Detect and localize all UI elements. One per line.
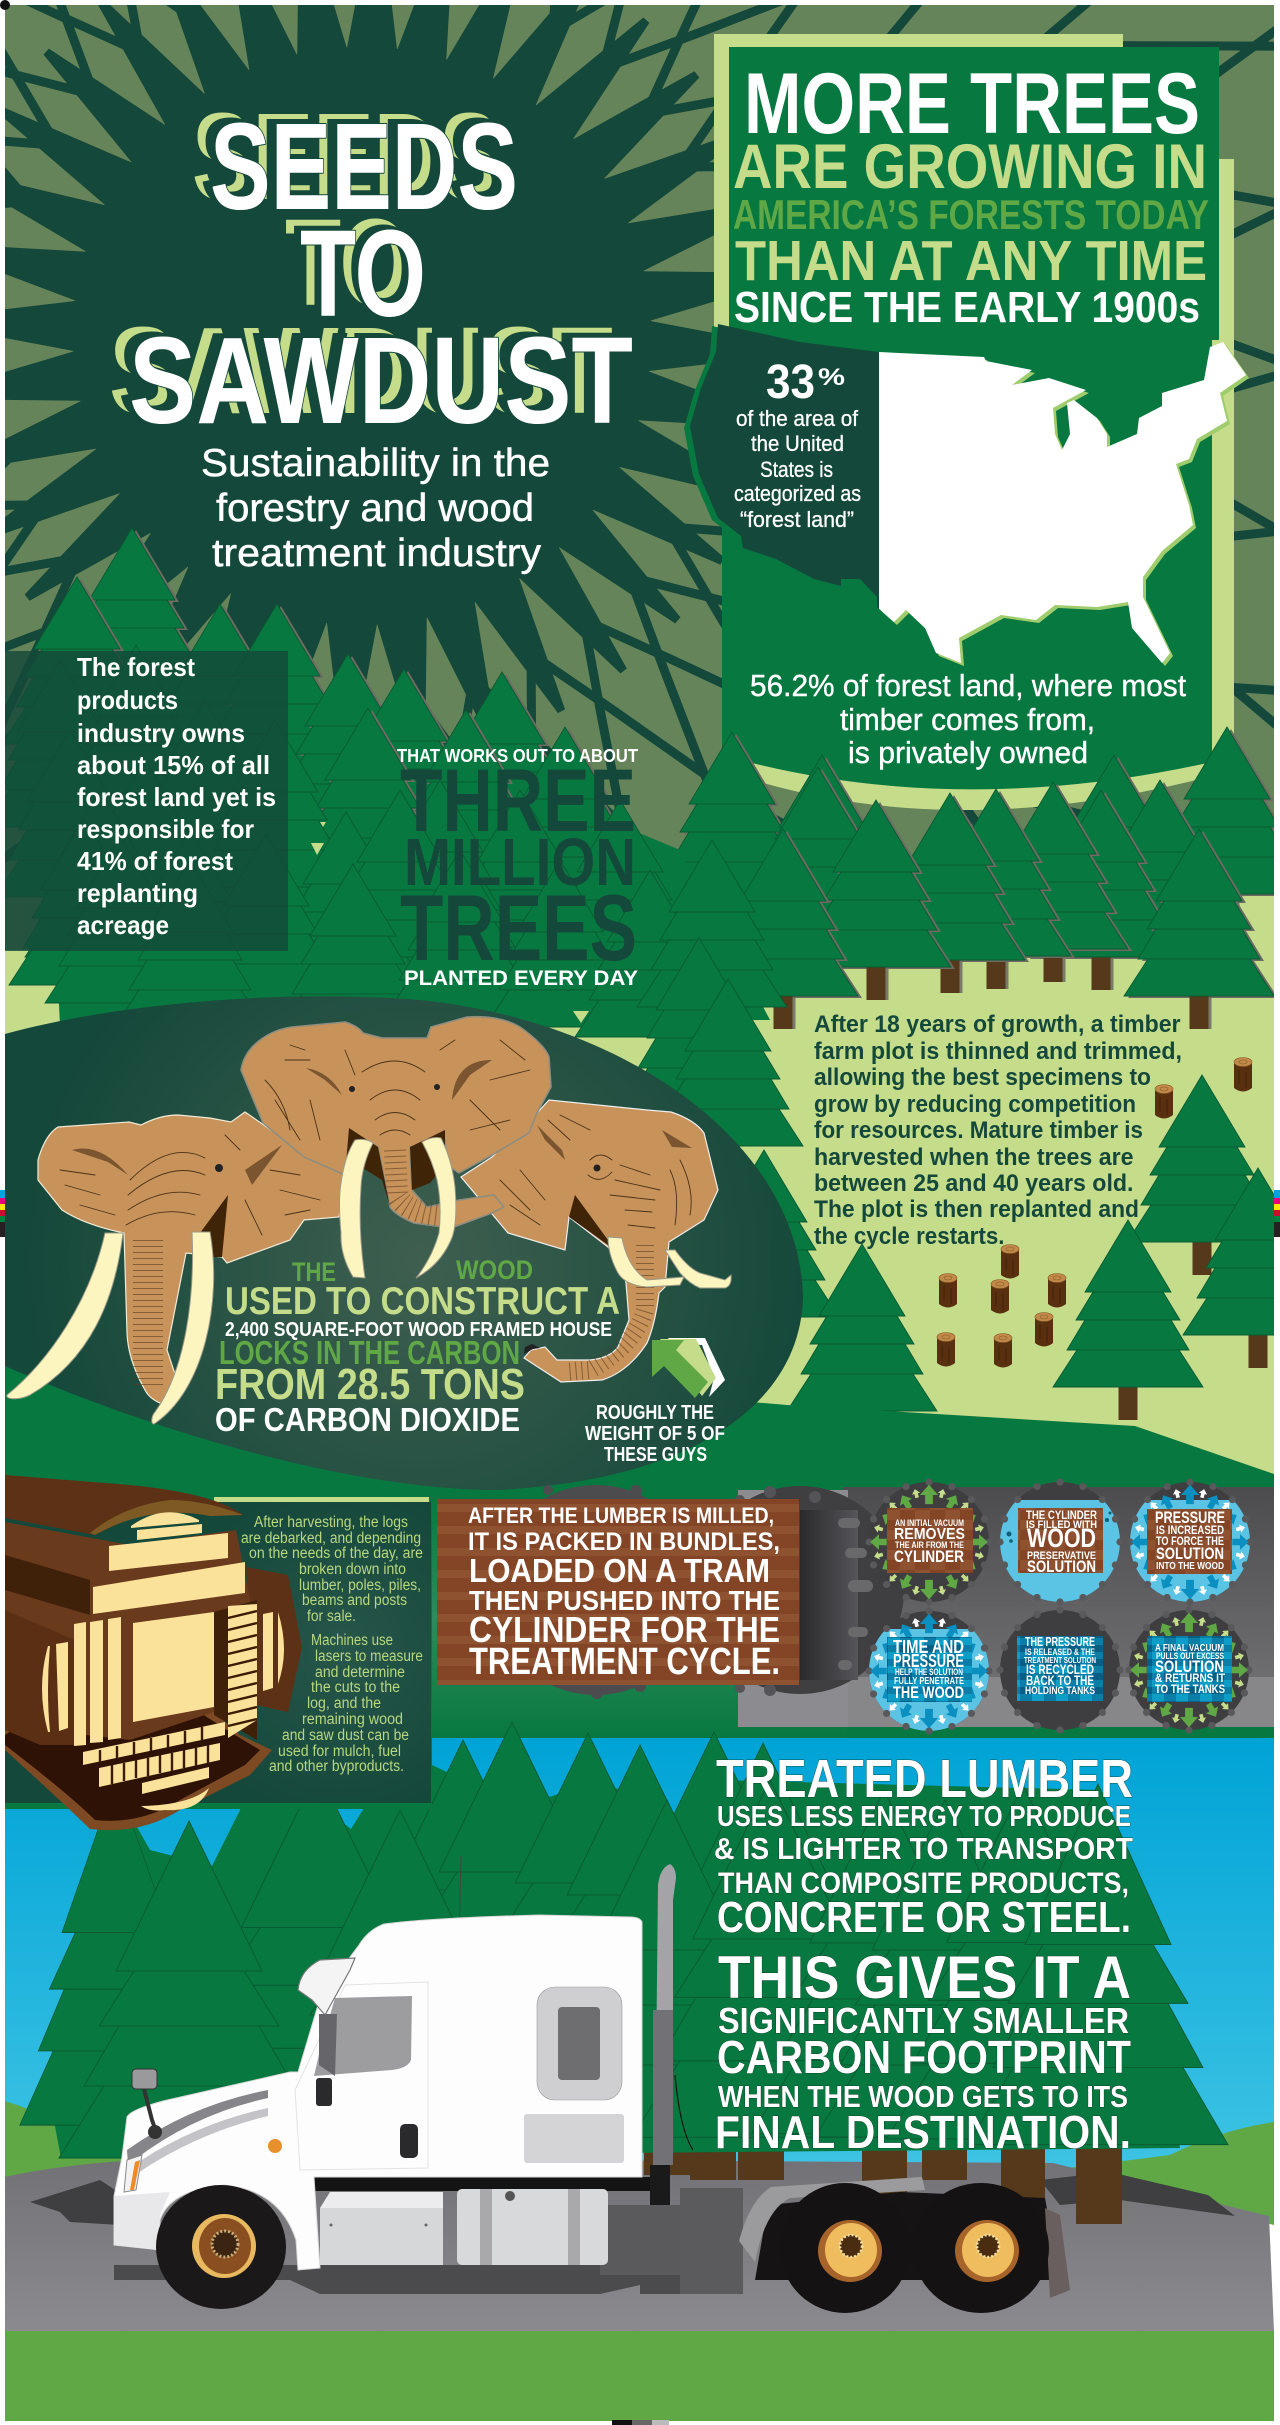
callout: three million trees: MILLION [404,825,636,900]
forest: back right trees [657,727,1280,1029]
text: log cutting: remaining wood [302,1711,403,1728]
text: timber cycle: After 18 years of growth, a timber [814,1011,1180,1038]
step 1: initial vacuum: THE AIR FROM THE [895,1540,964,1550]
stat: 33 percent: States is [760,457,833,482]
label: weight of elephants: WEIGHT OF 5 OF [585,1423,725,1445]
text: timber cycle: farm plot is thinned and trimmed, [814,1038,1182,1065]
step 4: time and pressure: TIME AND [893,1637,964,1657]
treatment band background [431,1487,1274,1765]
text: log cutting: After harvesting, the logs [254,1514,408,1531]
step 4: time and pressure: HELP THE SOLUTION [895,1667,963,1677]
step 2: cylinder filled: IS FILLED WITH [1026,1519,1097,1531]
door handle [400,2124,418,2158]
text: treated lumber: TREATED LUMBER [716,1749,1133,1809]
heading: more trees: THAN AT ANY TIME [735,229,1207,293]
background sunburst [5,5,1274,950]
text: timber cycle [814,1011,1182,1250]
title [112,112,632,424]
text: timber cycle: the cycle restarts. [814,1223,1004,1250]
subtitle: Sustainability in the [201,442,550,485]
stat: 33 percent: of the area of [736,406,859,431]
subtitle: forestry and wood [216,487,534,530]
heading: more trees: ARE GROWING IN [733,132,1207,202]
text: log cutting: broken down into [299,1561,406,1578]
toolbox and steps [320,2192,443,2265]
heading: more trees: SINCE THE EARLY 1900s [734,283,1200,332]
light green ground [5,895,1274,1490]
label: weight of elephants [585,1405,724,1461]
step 5: pressure released: IS RELEASED & THE [1025,1647,1095,1658]
forest: tall trees behind the truck [20,1722,1228,2224]
label: weight of elephants: ROUGHLY THE [596,1402,714,1424]
sleeper window [537,1987,622,2100]
text: log cutting: are debarked, and depending [241,1530,421,1547]
panel: forest ownership: 41% of forest [77,846,233,876]
text: privately owned [750,668,1186,770]
illustration: white semi truck [114,1856,1070,2313]
stat: 33 percent: the United [751,431,844,456]
text: log cutting: for sale. [307,1608,356,1625]
text: log cutting: log, and the [307,1695,381,1712]
subtitle: treatment industry [212,532,542,575]
step 2: cylinder filled: SOLUTION [1027,1557,1096,1576]
step 6: final vacuum: SOLUTION [1155,1657,1224,1676]
text: log cutting: the cuts to the [311,1679,400,1696]
panel: forest ownership: responsible for [77,814,254,844]
illustration: three elephants [7,1017,731,1424]
step 5: pressure released: BACK TO THE [1026,1672,1094,1688]
step 1: initial vacuum: CYLINDER [894,1547,964,1566]
title: SAWDUST [129,313,633,450]
title: TO [285,195,411,332]
step 6: final vacuum: & RETURNS IT [1155,1671,1226,1685]
panel: forest ownership: replanting [77,878,198,908]
bumper [114,2192,170,2250]
step 5: pressure released: TREATMENT SOLUTION [1024,1655,1096,1665]
text: carbon in a wood house: THE [292,1257,336,1287]
step 2: cylinder filled: PRESERVATIVE [1027,1550,1096,1562]
panel: after the lumber is milled: LOADED ON A TRAM [469,1552,770,1589]
road tree shadows [30,2172,1235,2225]
step 4: time and pressure: PRESSURE [893,1651,964,1671]
title: SEEDS [192,89,500,226]
text: log cutting: and determine [315,1664,405,1681]
elephant: center [241,1017,551,1278]
step 4: time and pressure: THE WOOD [893,1683,964,1702]
hood stripes [127,2090,268,2165]
step 2: cylinder filled: WOOD [1027,1523,1096,1553]
stat: 33 percent [734,356,861,532]
text: treated lumber: & IS LIGHTER TO TRANSPORT [714,1831,1133,1866]
text: treated lumber: WHEN THE WOOD GETS TO ITS [718,2079,1128,2114]
panel: forest ownership: The forest [77,652,195,682]
step 4: time and pressure [865,1607,993,1735]
step 2: cylinder filled: THE CYLINDER [1026,1508,1097,1522]
cab [114,1915,642,2270]
step 3: pressure increased: SOLUTION [1156,1544,1224,1563]
step 3: pressure increased: IS INCREASED [1156,1523,1224,1537]
door outline and details [295,1982,428,2170]
text: treated lumber: CARBON FOOTPRINT [717,2031,1131,2083]
side mirror [319,2014,337,2076]
arrow: toward elephants [652,1338,725,1398]
text: treated lumber: THIS GIVES IT A [718,1944,1131,2011]
panel: after the lumber is milled [437,1499,799,1685]
panel: more trees [684,34,1249,810]
panel: after the lumber is milled: TREATMENT CYCLE. [469,1641,780,1683]
road [5,2158,1274,2331]
text: timber cycle: for resources. Mature timber is [814,1117,1143,1144]
step 5: pressure released [996,1606,1124,1734]
map: United States forest land [684,324,1249,666]
sky [5,1738,1274,2180]
panel: forest ownership: about 15% of all [77,750,270,780]
text: log cutting: Machines use [311,1632,393,1649]
text: timber cycle: between 25 and 40 years old. [814,1170,1134,1197]
step 5: pressure released: IS RECYCLED [1026,1661,1094,1677]
illustration: treatment cylinder [543,1485,904,1727]
text: timber cycle: The plot is then replanted and [814,1196,1139,1223]
step 4: time and pressure: FULLY PENETRATE [894,1676,964,1687]
callout: three million trees: THAT WORKS OUT TO ABOUT [397,746,638,766]
title: SAWDUST [118,308,622,445]
label: weight of elephants: THESE GUYS [604,1444,707,1466]
roof deflector [298,1958,355,2015]
text: treated lumber: USES LESS ENERGY TO PRODUCE [717,1801,1131,1833]
stat: 33 percent: “forest land” [740,507,854,532]
panel: forest ownership: industry owns [77,718,245,748]
panel: forest ownership: products [77,685,178,715]
text: treated lumber: SIGNIFICANTLY SMALLER [718,2000,1129,2041]
antenna [458,1856,461,1985]
text: log cutting: and saw dust can be [282,1727,409,1744]
title: SEEDS [200,94,508,231]
step 6: final vacuum: TO THE TANKS [1155,1682,1225,1696]
step 5: pressure released: HOLDING TANKS [1025,1685,1095,1697]
text: treated lumber: THAN COMPOSITE PRODUCTS, [718,1867,1129,1900]
rear wheel two [913,2183,1049,2313]
step 2: cylinder filled [996,1478,1124,1606]
forest: left trees [0,528,839,1317]
text: carbon in a wood house: WOOD [456,1255,533,1285]
text: log cutting [241,1514,423,1775]
panel: after the lumber is milled: THEN PUSHED INTO THE [469,1585,780,1616]
panel: forest ownership: acreage [77,910,169,940]
heading: more trees [733,56,1209,332]
step 3: pressure increased: TO FORCE THE [1156,1534,1224,1548]
front wheel [156,2185,286,2309]
lime gaps between trees [311,822,589,1023]
panel: log cutting background [5,1490,432,1809]
title: TO [293,201,419,338]
step 6: final vacuum: A FINAL VACUUM [1155,1643,1224,1654]
grass [5,2331,1274,2423]
subtitle [201,442,550,575]
step 1: initial vacuum: REMOVES [894,1526,965,1543]
callout: three million trees: TREES [400,875,637,980]
panel: forest ownership: forest land yet is [77,782,276,812]
green hills at road [5,2101,1274,2225]
text: privately owned: timber comes from, [840,702,1095,737]
title: TO [300,206,426,343]
text: privately owned: 56.2% of forest land, where most [750,668,1186,703]
text: carbon in a wood house: FROM 28.5 TONS [215,1360,525,1409]
text: log cutting: lasers to measure [315,1648,423,1665]
elephant: right [461,1100,731,1382]
text: treated lumber [714,1749,1133,2158]
stat: 33 percent: 33 [766,356,815,409]
illustration: sawn log [5,1475,302,1830]
lights [124,2139,282,2192]
title: SAWDUST [109,303,613,440]
text: log cutting: on the needs of the day, are [249,1545,423,1562]
panel: after the lumber is milled: IT IS PACKED IN BUNDLES, [468,1528,780,1556]
rear wheel one [780,2183,910,2313]
fuel tank [457,2189,608,2265]
text: carbon in a wood house: OF CARBON DIOXIDE [215,1401,520,1438]
stat: 33 percent: % [818,364,845,391]
callout: three million trees [397,746,638,990]
callout: three million trees: PLANTED EVERY DAY [404,967,638,990]
step 1: initial vacuum: AN INITIAL VACUUM [895,1518,964,1528]
text: timber cycle: grow by reducing competition [814,1091,1136,1118]
text: carbon in a wood house: USED TO CONSTRUCT A [225,1280,620,1323]
text: timber cycle: harvested when the trees are [814,1144,1134,1171]
text: carbon in a wood house [215,1255,620,1438]
step 3: pressure increased [1126,1478,1254,1606]
text: timber cycle: allowing the best specimens to [814,1064,1151,1091]
text: log cutting: and other byproducts. [269,1758,404,1775]
step 1: initial vacuum [865,1478,993,1606]
panel: forest ownership [5,651,288,951]
panel: elephants oval [5,996,803,1490]
step 6: final vacuum [1125,1606,1253,1734]
text: privately owned: is privately owned [848,735,1088,770]
stat: 33 percent: categorized as [734,481,861,506]
hood mirror [132,2069,162,2139]
text: log cutting: beams and posts [302,1592,407,1609]
elephant: left [7,1112,345,1424]
step 3: pressure increased: INTO THE WOOD [1156,1560,1224,1572]
panel: after the lumber is milled: CYLINDER FOR THE [469,1609,780,1650]
foreground trees and stumps [790,1057,1274,1420]
step 6: final vacuum: PULLS OUT EXCESS [1156,1651,1224,1662]
callout: three million trees: THREE [400,750,636,850]
text: treated lumber: CONCRETE OR STEEL. [717,1893,1131,1942]
sleeper panel [524,2114,624,2163]
panel: after the lumber is milled: AFTER THE LUMBER IS MILLED, [468,1503,774,1528]
title: SEEDS [210,99,518,236]
exhaust stack [653,1864,693,2165]
text: log cutting: used for mulch, fuel [278,1743,401,1760]
side window [314,1996,412,2076]
text: treated lumber: FINAL DESTINATION. [715,2106,1131,2158]
step 3: pressure increased: PRESSURE [1155,1508,1225,1527]
text: carbon in a wood house: 2,400 SQUARE-FOOT WOOD FRAMED HOUSE [225,1319,612,1341]
text: log cutting: lumber, poles, piles, [299,1577,421,1594]
green hill [5,1366,1274,1490]
text: carbon in a wood house: LOCKS IN THE CARBON [219,1334,520,1371]
chassis and dark frame [114,2165,1070,2298]
step 5: pressure released: THE PRESSURE [1025,1634,1095,1649]
